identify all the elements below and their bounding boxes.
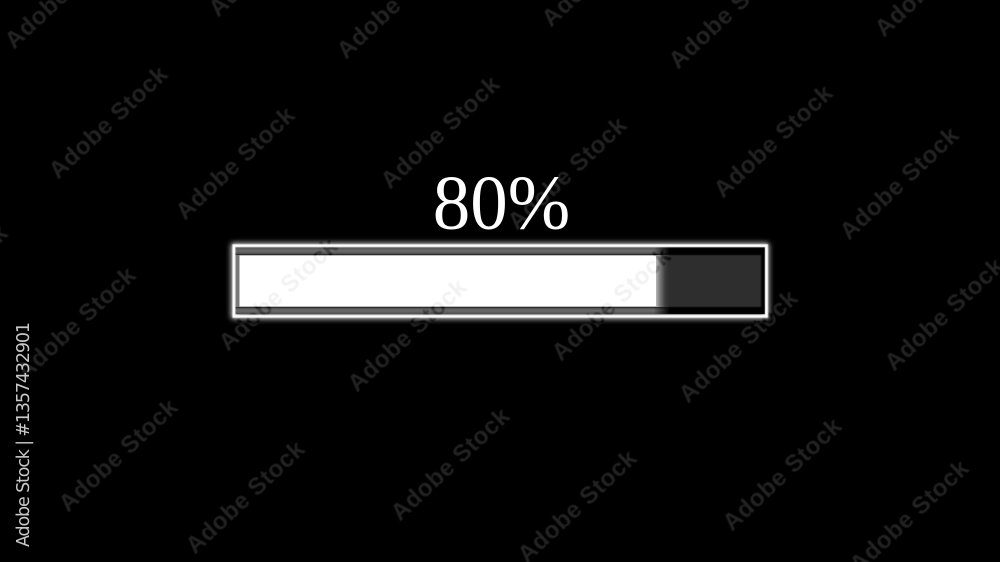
watermark: repeated Adobe Stock: Adobe Stock	[181, 435, 311, 559]
watermark: repeated Adobe Stock: Adobe Stock	[709, 79, 839, 203]
band shading top	[235, 247, 765, 255]
watermark: repeated Adobe Stock: Adobe Stock	[214, 232, 344, 356]
watermark: repeated Adobe Stock: Adobe Stock	[171, 101, 301, 225]
bar outline	[234, 246, 766, 316]
watermark: repeated Adobe Stock: Adobe Stock	[44, 60, 174, 184]
wash softening watermark on white fill	[240, 256, 656, 306]
watermark: repeated Adobe Stock: Adobe Stock	[343, 273, 473, 397]
watermark: repeated Adobe Stock: Adobe Stock	[718, 412, 848, 536]
bar track inner band	[235, 247, 765, 314]
watermark: repeated Adobe Stock: Adobe Stock	[12, 261, 142, 385]
vertical stock id text: Adobe Stock | #1357432901	[14, 322, 34, 547]
fade at fill edge	[656, 255, 669, 307]
watermark: repeated Adobe Stock: Adobe Stock	[503, 111, 633, 235]
dark remaining segment	[656, 255, 761, 307]
watermark: repeated Adobe Stock: Adobe Stock	[376, 70, 506, 194]
watermark: repeated Adobe Stock: Adobe Stock	[54, 393, 184, 517]
white fill at 80%	[240, 256, 656, 306]
watermark: repeated Adobe Stock: Adobe Stock	[674, 284, 804, 408]
watermark: repeated Adobe Stock: Adobe Stock	[547, 242, 677, 366]
percentage label: 80%	[433, 161, 570, 246]
watermark: repeated Adobe Stock: Adobe Stock	[386, 402, 516, 526]
band shading bottom	[235, 307, 765, 314]
progress bar track	[234, 246, 766, 316]
bar glow	[234, 246, 766, 316]
watermark: repeated Adobe Stock: Adobe Stock	[835, 121, 965, 245]
